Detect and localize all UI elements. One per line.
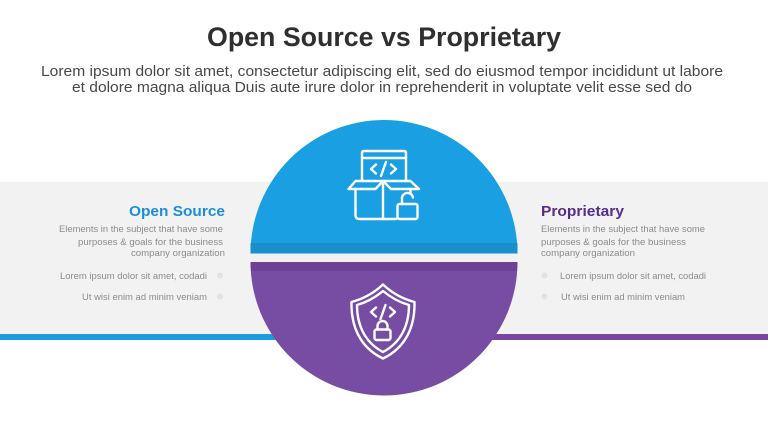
description: proprietary: company organization — [541, 248, 635, 259]
description: proprietary: purposes & goals for the business — [541, 237, 686, 248]
subtitle — [41, 64, 723, 96]
subtitle: Lorem ipsum dolor sit amet, consectetur adipiscing elit, sed do eiusmod tempor incididunt ut labore — [41, 64, 723, 80]
bullet list: open source: Lorem ipsum dolor sit amet, codadi — [60, 271, 207, 282]
description: open source — [59, 224, 225, 259]
description: open source: company organization — [131, 248, 225, 259]
title: Open Source vs Proprietary — [207, 22, 561, 52]
description: open source: Elements in the subject that have some — [59, 224, 223, 235]
panel: open source text — [59, 204, 225, 303]
heading: proprietary: Proprietary — [541, 204, 624, 220]
icon: open box with code window and open lock — [348, 151, 419, 219]
bottom semicircle: proprietary — [250, 262, 518, 396]
blue baseline bar — [0, 334, 290, 340]
bullet list: proprietary: Ut wisi enim ad minim veniam — [561, 292, 685, 303]
purple baseline bar — [478, 334, 768, 340]
grey background band — [0, 182, 768, 334]
panel: proprietary text — [541, 204, 706, 303]
icon: shield with code and padlock — [351, 284, 415, 358]
bullet list: open source: Ut wisi enim ad minim veniam — [82, 292, 207, 303]
description: proprietary: Elements in the subject that have some — [541, 224, 705, 235]
bullet list: proprietary — [542, 271, 706, 303]
subtitle: et dolore magna aliqua Duis aute irure dolor in reprehenderit in voluptate velit esse sed do — [72, 80, 692, 96]
heading: open source: Open Source — [129, 204, 225, 220]
description: open source: purposes & goals for the business — [78, 237, 223, 248]
bullet list: proprietary: Lorem ipsum dolor sit amet, codadi — [560, 271, 706, 282]
top semicircle: open source — [250, 120, 518, 254]
bullet list: open source — [60, 271, 223, 303]
description: proprietary — [541, 224, 705, 259]
